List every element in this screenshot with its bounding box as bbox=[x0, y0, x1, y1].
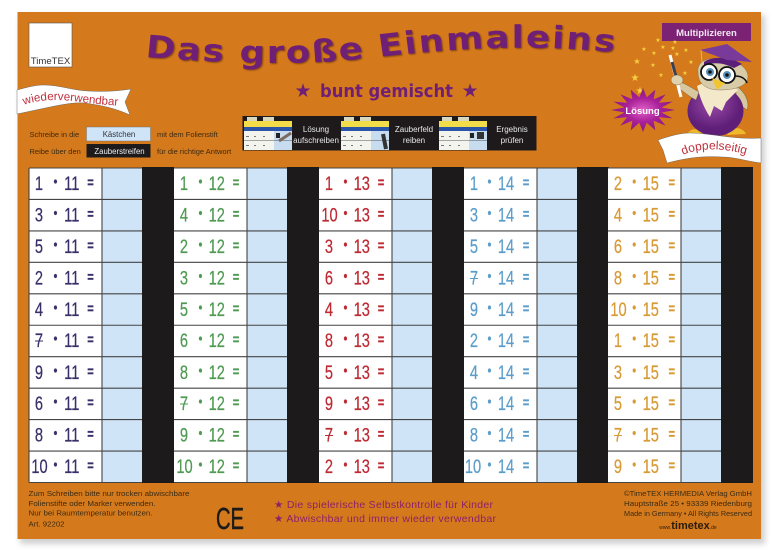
equations: 8 bbox=[180, 361, 188, 384]
equations: • bbox=[632, 393, 637, 410]
equations: = bbox=[233, 237, 240, 254]
equations: 14 bbox=[498, 235, 514, 258]
equations: • bbox=[488, 204, 492, 221]
equations: 12 bbox=[209, 298, 225, 321]
equations: • bbox=[344, 173, 348, 190]
equations: 7 bbox=[180, 392, 188, 415]
logo: TimeTEX bbox=[29, 23, 72, 67]
equations: 15 bbox=[643, 392, 659, 415]
equations: • bbox=[54, 204, 58, 221]
equations: = bbox=[87, 269, 94, 286]
equations: = bbox=[523, 269, 530, 286]
equations: 15 bbox=[643, 203, 659, 226]
equations: 11 bbox=[64, 203, 79, 226]
equations: = bbox=[523, 174, 530, 191]
footer: publisher: Hauptstraße 25 • 93339 Riedenburg bbox=[624, 499, 752, 508]
equations: • bbox=[344, 330, 348, 347]
magic stars: ★ bbox=[641, 46, 647, 53]
equations: • bbox=[488, 330, 492, 347]
equations: 14 bbox=[498, 361, 514, 384]
equations: = bbox=[378, 363, 385, 380]
footer: features bbox=[274, 499, 496, 525]
equations: • bbox=[199, 330, 203, 347]
cells bbox=[464, 167, 609, 483]
equations: = bbox=[87, 331, 94, 348]
banner: wiederverwendbar: wiederverwendbar bbox=[22, 92, 118, 106]
footer: usage notes: Nur bei Raumtemperatur benutzen. bbox=[28, 508, 152, 518]
equations: 13 bbox=[354, 266, 370, 289]
instructions: Reibe über den bbox=[30, 147, 81, 156]
equations: = bbox=[668, 300, 675, 317]
equations: 13 bbox=[354, 455, 370, 478]
subtitle: ★ bbox=[294, 80, 312, 102]
cells bbox=[319, 167, 464, 483]
equations: • bbox=[488, 236, 492, 253]
equations: 5 bbox=[470, 235, 478, 258]
equations: 2 bbox=[325, 455, 333, 478]
equations: 3 bbox=[470, 203, 478, 226]
equations: 11 bbox=[64, 361, 79, 384]
equations: 9 bbox=[614, 455, 622, 478]
owl hand bbox=[671, 75, 683, 85]
equations: 11 bbox=[64, 423, 79, 446]
equations: 1 bbox=[35, 172, 43, 195]
equations: 5 bbox=[614, 392, 622, 415]
equations: 8 bbox=[35, 423, 43, 446]
equations: 3 bbox=[614, 361, 622, 384]
owl head bbox=[698, 59, 748, 90]
equations: • bbox=[632, 267, 637, 284]
equations: • bbox=[488, 424, 492, 441]
equations: 13 bbox=[354, 298, 370, 321]
step 3 label: prüfen bbox=[501, 136, 523, 145]
magic stars: ★ bbox=[670, 45, 676, 52]
equations: = bbox=[378, 269, 385, 286]
magic stars: ★ bbox=[688, 59, 694, 66]
footer: usage notes: Zum Schreiben bitte nur trocken abwischbare bbox=[28, 489, 190, 498]
equations: 2 bbox=[35, 266, 43, 289]
equations: = bbox=[523, 363, 530, 380]
equations: = bbox=[523, 237, 530, 254]
equations: = bbox=[668, 269, 675, 286]
owl glasses and eyes bbox=[701, 64, 747, 83]
equations: • bbox=[199, 267, 203, 284]
equations: 2 bbox=[470, 329, 478, 352]
equations: = bbox=[668, 174, 675, 191]
magic stars: ★ bbox=[658, 72, 664, 79]
equations: 6 bbox=[470, 392, 478, 415]
magic stars: ★ bbox=[651, 50, 657, 57]
equations: 12 bbox=[209, 172, 225, 195]
equations: 9 bbox=[35, 361, 43, 384]
equations: = bbox=[233, 363, 240, 380]
equations: 14 bbox=[498, 172, 514, 195]
instructions: Schreibe in die bbox=[30, 130, 79, 139]
equations: • bbox=[199, 204, 203, 221]
equations: = bbox=[87, 237, 94, 254]
equations: • bbox=[344, 204, 348, 221]
panel: times 15 bbox=[608, 167, 753, 483]
equations bbox=[321, 172, 385, 478]
equations: 11 bbox=[64, 298, 79, 321]
equations: = bbox=[523, 426, 530, 443]
footer: usage notes: Art. 92202 bbox=[28, 520, 64, 528]
equations: = bbox=[233, 269, 240, 286]
equations: = bbox=[87, 300, 94, 317]
equations: 3 bbox=[180, 266, 188, 289]
equations: • bbox=[199, 299, 203, 316]
equations: 4 bbox=[614, 203, 622, 226]
equations: = bbox=[523, 206, 530, 223]
equations: 5 bbox=[180, 298, 188, 321]
equations: 13 bbox=[354, 172, 370, 195]
equations: = bbox=[378, 174, 385, 191]
equations: 12 bbox=[209, 203, 225, 226]
banner: doppelseitig: doppelseitig bbox=[682, 140, 747, 156]
equations: 15 bbox=[643, 361, 659, 384]
equations: • bbox=[54, 299, 58, 316]
banner: doppelseitig bbox=[658, 132, 762, 164]
equations: • bbox=[632, 236, 637, 253]
banner: wiederverwendbar bbox=[16, 84, 132, 116]
instructions: für die richtige Antwort bbox=[157, 147, 232, 156]
equations: 3 bbox=[35, 203, 43, 226]
owl cap bbox=[700, 44, 752, 68]
panel: times 11 bbox=[29, 167, 174, 483]
footer: publisher: www.timetex.de bbox=[659, 520, 717, 532]
equations: 1 bbox=[325, 172, 333, 195]
equations: • bbox=[344, 362, 348, 379]
equations: • bbox=[344, 393, 348, 410]
equations: • bbox=[632, 173, 637, 190]
equations: = bbox=[378, 426, 385, 443]
equations: = bbox=[378, 206, 385, 223]
owl body bbox=[688, 86, 744, 136]
equations: = bbox=[233, 394, 240, 411]
step 2 label: Zauberfeld bbox=[395, 125, 433, 134]
equations: = bbox=[523, 300, 530, 317]
magic stars: ★ bbox=[650, 62, 656, 69]
equations: = bbox=[668, 394, 675, 411]
step 1 label: aufschreiben bbox=[293, 136, 339, 145]
equations: 12 bbox=[209, 361, 225, 384]
equations: 5 bbox=[325, 361, 333, 384]
equations: 14 bbox=[498, 423, 514, 446]
equations: 8 bbox=[470, 423, 478, 446]
equations: • bbox=[488, 299, 492, 316]
equations: = bbox=[668, 426, 675, 443]
equations: = bbox=[87, 206, 94, 223]
equations: 15 bbox=[643, 172, 659, 195]
equations: = bbox=[378, 300, 385, 317]
equations: • bbox=[632, 204, 637, 221]
equations: 13 bbox=[354, 423, 370, 446]
equations: = bbox=[668, 237, 675, 254]
equations: 11 bbox=[64, 392, 79, 415]
steps strip bbox=[242, 116, 536, 150]
equations: = bbox=[87, 174, 94, 191]
cells bbox=[174, 167, 319, 483]
equations: • bbox=[54, 173, 58, 190]
equations: • bbox=[199, 362, 203, 379]
equations: 6 bbox=[325, 266, 333, 289]
equations: • bbox=[344, 267, 348, 284]
equations bbox=[610, 172, 675, 478]
equations: 1 bbox=[470, 172, 478, 195]
equations: • bbox=[199, 424, 203, 441]
owl wing bbox=[736, 86, 748, 110]
equations: 14 bbox=[498, 298, 514, 321]
equations: = bbox=[668, 457, 675, 474]
subtitle: ★ bbox=[461, 80, 479, 102]
footer: features: ★ Die spielerische Selbstkontrolle für Kinder bbox=[274, 499, 494, 511]
equations: 15 bbox=[643, 298, 659, 321]
equations: = bbox=[378, 457, 385, 474]
equations: 15 bbox=[643, 329, 659, 352]
step 1 label: Lösung bbox=[303, 125, 329, 134]
footer: publisher: Made in Germany • All Rights Reserved bbox=[624, 509, 752, 518]
equations: 13 bbox=[354, 235, 370, 258]
equations: 8 bbox=[614, 266, 622, 289]
magic stars: ★ bbox=[655, 37, 661, 44]
equations: • bbox=[54, 236, 58, 253]
owl arm bbox=[677, 82, 699, 100]
footer: features: ★ Abwischbar und immer wieder verwendbar bbox=[274, 513, 496, 525]
equations: 13 bbox=[354, 361, 370, 384]
equations: • bbox=[54, 267, 58, 284]
equations: = bbox=[378, 331, 385, 348]
equations: • bbox=[199, 236, 203, 253]
equations: = bbox=[87, 394, 94, 411]
owl feet bbox=[686, 128, 746, 136]
equations: 14 bbox=[498, 329, 514, 352]
equations: • bbox=[488, 267, 492, 284]
equations: 8 bbox=[325, 329, 333, 352]
equations: = bbox=[87, 363, 94, 380]
equations bbox=[31, 172, 94, 478]
instructions: mit dem Folienstift bbox=[157, 130, 219, 139]
equations: 12 bbox=[209, 392, 225, 415]
label: Multiplizieren: Multiplizieren bbox=[676, 28, 737, 39]
equations: = bbox=[233, 426, 240, 443]
equations: 10 bbox=[31, 455, 48, 478]
cells bbox=[608, 167, 753, 483]
footer: usage notes: Folienstifte oder Marker verwenden. bbox=[28, 499, 156, 508]
equations: = bbox=[87, 426, 94, 443]
equations: 7 bbox=[470, 266, 478, 289]
equations: 15 bbox=[643, 423, 659, 446]
equations: 12 bbox=[209, 266, 225, 289]
equations: • bbox=[632, 330, 637, 347]
logo: TimeTEX: TimeTEX bbox=[31, 56, 71, 67]
equations: • bbox=[488, 362, 492, 379]
equations: = bbox=[233, 457, 240, 474]
equations bbox=[176, 172, 240, 478]
equations: 7 bbox=[35, 329, 43, 352]
subtitle: bunt gemischt bbox=[320, 81, 453, 102]
equations bbox=[465, 172, 530, 478]
equations: 3 bbox=[325, 235, 333, 258]
equations: 11 bbox=[64, 235, 79, 258]
equations: • bbox=[344, 236, 348, 253]
owl wand bbox=[670, 55, 681, 97]
icon: CE mark: CE bbox=[216, 501, 244, 536]
equations: = bbox=[233, 331, 240, 348]
equations: 12 bbox=[209, 455, 225, 478]
step 3 thumbnail bbox=[439, 117, 487, 150]
magic stars: ★ bbox=[674, 51, 680, 58]
footer: usage notes bbox=[28, 489, 190, 528]
instructions: Kästchen bbox=[103, 130, 135, 139]
equations: • bbox=[632, 362, 637, 379]
equations: 6 bbox=[180, 329, 188, 352]
equations: • bbox=[632, 456, 637, 473]
magic stars: ★ bbox=[682, 70, 688, 77]
step 3 label: Ergebnis bbox=[496, 125, 528, 134]
magic stars: ★ bbox=[672, 39, 678, 46]
equations: • bbox=[344, 424, 348, 441]
equations: • bbox=[632, 299, 637, 316]
equations: 4 bbox=[325, 298, 333, 321]
instructions: Zauberstreifen bbox=[94, 147, 145, 156]
equations: • bbox=[344, 456, 348, 473]
equations: 12 bbox=[209, 329, 225, 352]
icon: owl with wand bbox=[670, 44, 752, 136]
starburst: Lösung bbox=[611, 88, 675, 132]
step 2 thumbnail bbox=[341, 117, 389, 150]
equations: 10 bbox=[321, 203, 338, 226]
equations: • bbox=[344, 299, 348, 316]
equations: • bbox=[54, 424, 58, 441]
equations: 13 bbox=[354, 392, 370, 415]
equations: 9 bbox=[180, 423, 188, 446]
equations: 5 bbox=[35, 235, 43, 258]
equations: = bbox=[233, 206, 240, 223]
equations: • bbox=[199, 173, 203, 190]
magic stars: ★ bbox=[683, 47, 689, 54]
magic stars: ★ bbox=[633, 57, 641, 66]
equations: 14 bbox=[498, 266, 514, 289]
label: Multiplizieren bbox=[662, 23, 751, 41]
equations: 11 bbox=[64, 455, 79, 478]
equations: 11 bbox=[64, 329, 79, 352]
equations: • bbox=[488, 393, 492, 410]
equations: = bbox=[523, 457, 530, 474]
equations: 6 bbox=[35, 392, 43, 415]
owl chest bbox=[697, 82, 738, 117]
equations: 7 bbox=[614, 423, 622, 446]
panel: times 13 bbox=[319, 167, 464, 483]
step 1 thumbnail bbox=[244, 117, 292, 150]
equations: 10 bbox=[176, 455, 193, 478]
equations: 9 bbox=[325, 392, 333, 415]
equations: 13 bbox=[354, 329, 370, 352]
owl beak bbox=[712, 78, 725, 90]
panel: times 14 bbox=[464, 167, 609, 483]
equations: 7 bbox=[325, 423, 333, 446]
equations: = bbox=[233, 300, 240, 317]
equations: = bbox=[378, 394, 385, 411]
equations: = bbox=[668, 206, 675, 223]
cells bbox=[29, 167, 174, 483]
equations: 12 bbox=[209, 235, 225, 258]
equations: 9 bbox=[470, 298, 478, 321]
equations: = bbox=[668, 363, 675, 380]
equations: 15 bbox=[643, 455, 659, 478]
magic stars: ★ bbox=[636, 86, 645, 97]
equations: • bbox=[632, 424, 637, 441]
equations: • bbox=[488, 456, 492, 473]
equations: 15 bbox=[643, 235, 659, 258]
footer: publisher: ©TimeTEX HERMEDIA Verlag GmbH bbox=[624, 489, 752, 498]
equations: • bbox=[488, 173, 492, 190]
equations: 14 bbox=[498, 455, 514, 478]
equations: 13 bbox=[354, 203, 370, 226]
equations: 14 bbox=[498, 203, 514, 226]
footer: publisher bbox=[624, 489, 752, 532]
equations: = bbox=[523, 394, 530, 411]
equations: • bbox=[54, 393, 58, 410]
equations: 15 bbox=[643, 266, 659, 289]
magic stars: ★ bbox=[660, 44, 666, 51]
equations: 1 bbox=[614, 329, 622, 352]
equations: 2 bbox=[614, 172, 622, 195]
equations: 2 bbox=[180, 235, 188, 258]
equations: 12 bbox=[209, 423, 225, 446]
equations: • bbox=[199, 456, 203, 473]
equations: 6 bbox=[614, 235, 622, 258]
title: Das große Einmaleins bbox=[148, 24, 615, 72]
magic stars: ★ bbox=[631, 73, 640, 84]
equations: 4 bbox=[35, 298, 43, 321]
equations: 4 bbox=[180, 203, 188, 226]
panel: times 12 bbox=[174, 167, 319, 483]
step 2 label: reiben bbox=[403, 136, 425, 145]
equations: • bbox=[199, 393, 203, 410]
equations: 11 bbox=[64, 266, 79, 289]
equations: = bbox=[378, 237, 385, 254]
equations: = bbox=[233, 174, 240, 191]
equations: 14 bbox=[498, 392, 514, 415]
equations: 10 bbox=[465, 455, 481, 478]
equations: • bbox=[54, 330, 58, 347]
instructions bbox=[30, 127, 232, 158]
equations: • bbox=[54, 456, 58, 473]
starburst: Lösung: Lösung bbox=[625, 106, 660, 117]
equations: = bbox=[523, 331, 530, 348]
equations: = bbox=[87, 457, 94, 474]
equations: 11 bbox=[64, 172, 79, 195]
equations: 1 bbox=[180, 172, 188, 195]
equations: 10 bbox=[610, 298, 627, 321]
equations: • bbox=[54, 362, 58, 379]
equations: 4 bbox=[470, 361, 478, 384]
equations: = bbox=[668, 331, 675, 348]
